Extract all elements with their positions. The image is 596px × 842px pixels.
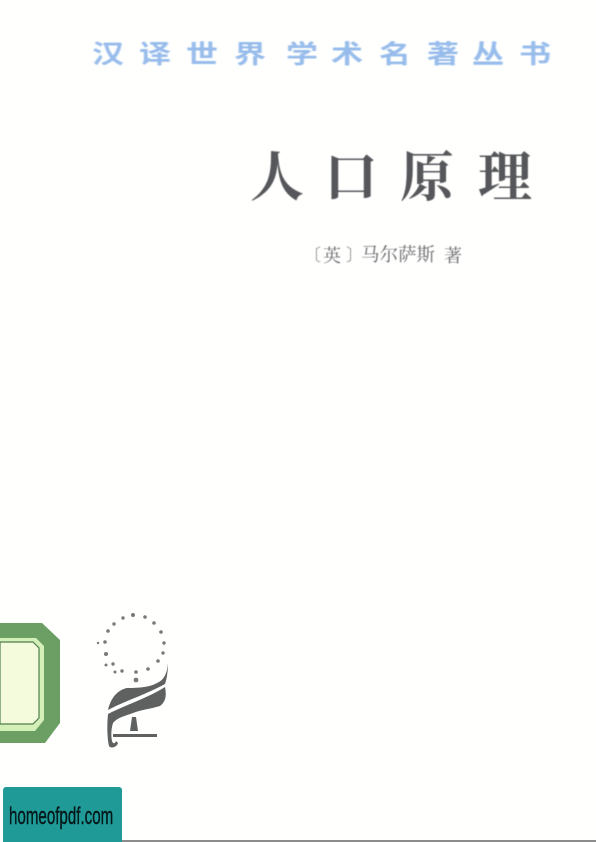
book title: 原 <box>400 148 454 208</box>
series title: 著 <box>427 40 459 68</box>
author line: 马尔萨斯 <box>361 246 435 266</box>
author line: 〕 <box>346 246 363 265</box>
book title <box>250 148 532 208</box>
author line: 著 <box>444 246 462 266</box>
book title: 人 <box>250 148 304 208</box>
series title: 汉 <box>92 40 124 68</box>
author line <box>304 244 462 266</box>
author line: 〔 <box>304 246 321 265</box>
watermark badge: homeofpdf.com <box>9 803 113 830</box>
library label: green octagonal frame <box>0 623 60 743</box>
bottom edge line <box>122 840 596 842</box>
series title: 丛 <box>472 40 504 68</box>
series title: 术 <box>331 40 363 68</box>
author line: 英 <box>323 246 341 266</box>
series title: 名 <box>379 40 411 68</box>
series title: 界 <box>234 40 266 68</box>
book title: 理 <box>478 148 532 208</box>
book title: 口 <box>324 148 378 208</box>
publisher logo: ring of dots above a feather leaf <box>96 613 168 748</box>
watermark badge <box>3 787 122 842</box>
dot ring <box>97 613 166 682</box>
series title: 世 <box>186 40 218 68</box>
series title: 译 <box>139 40 171 68</box>
series title: 学 <box>286 40 318 68</box>
series title <box>92 40 551 68</box>
series title: 书 <box>519 40 551 68</box>
feather leaf <box>107 663 168 747</box>
